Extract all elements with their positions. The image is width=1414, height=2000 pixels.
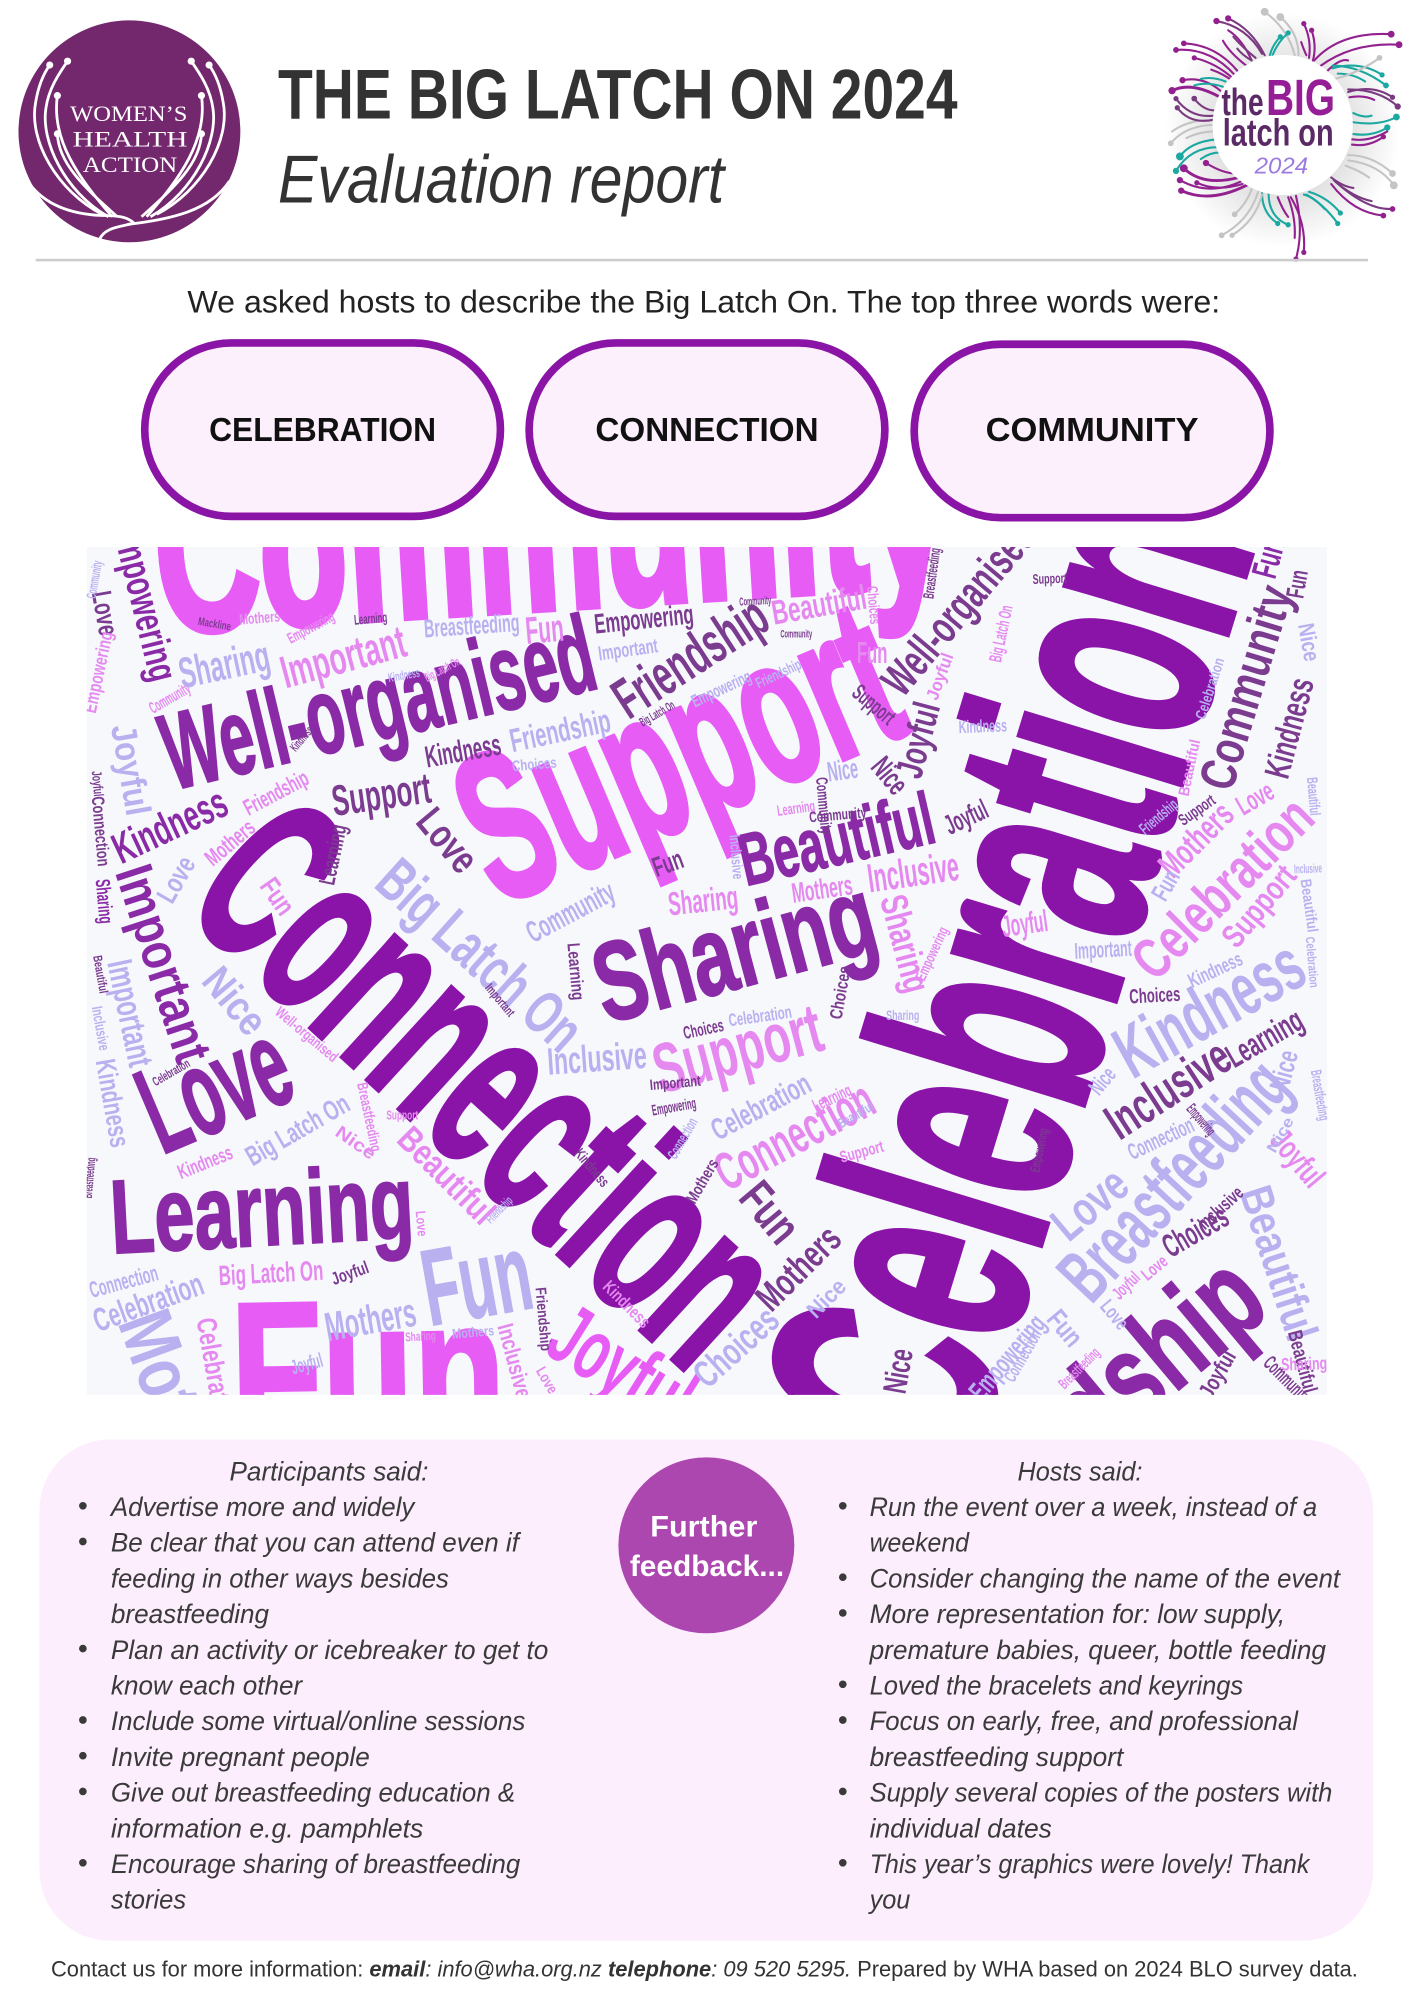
group: medium words: Joyful bbox=[89, 770, 107, 797]
word: Well-organised: Well-organised bbox=[149, 592, 606, 813]
group: medium words: Mothers bbox=[790, 869, 855, 909]
group: medium words: Beautiful bbox=[1283, 1328, 1321, 1395]
group: medium words: Support bbox=[847, 679, 901, 730]
list: participants said: Plan an activity or icebreaker to get to bbox=[111, 1635, 548, 1665]
badge: further feedback: Further bbox=[650, 1510, 757, 1543]
group: medium words: Important bbox=[275, 615, 411, 698]
footer contact line: Contact us for more information: email: info@wha.org.nz telephone: 09 520 5295. Prepared by WHA based on 2024 BLO survey data. bbox=[51, 1956, 1358, 1981]
group: medium words: Mothers bbox=[199, 814, 260, 871]
badge: further feedback bbox=[618, 1457, 794, 1633]
logo: Women's Health Action: ACTION bbox=[83, 153, 178, 177]
group: medium words: Love bbox=[1137, 1251, 1172, 1284]
group: medium words: Kindness bbox=[387, 665, 421, 685]
group: medium words: Friendship bbox=[532, 1287, 554, 1352]
title: THE BIG LATCH ON 2024 bbox=[278, 56, 958, 134]
group: medium words: Fun bbox=[729, 1171, 811, 1254]
group: medium words: Choices bbox=[511, 755, 557, 775]
group: medium words: Nice bbox=[332, 1122, 380, 1164]
list: hosts said: breastfeeding support bbox=[870, 1742, 1125, 1772]
group: medium words: Inclusive bbox=[864, 843, 962, 901]
group: medium words: Joyful bbox=[1263, 1123, 1332, 1195]
group: medium words: Fun bbox=[254, 872, 301, 921]
group: medium words: Breastfeeding bbox=[1055, 1345, 1104, 1393]
list: participants said: Include some virtual/online sessions bbox=[111, 1706, 525, 1736]
group: medium words: Learning bbox=[563, 942, 588, 1001]
word: Love: Love bbox=[119, 994, 311, 1180]
list: hosts said: Supply several copies of the posters with bbox=[870, 1778, 1332, 1808]
group: medium words: Love bbox=[413, 1210, 431, 1237]
group: medium words: Empowering bbox=[1183, 1101, 1219, 1139]
group: medium words: Beautiful bbox=[90, 954, 112, 994]
group: medium words: Celebration bbox=[150, 1056, 192, 1089]
group: medium words: Kindness bbox=[571, 1146, 612, 1191]
group: medium words: Nice bbox=[1083, 1062, 1121, 1100]
group: medium words: Sharing bbox=[405, 1328, 436, 1344]
group: medium words: Learning bbox=[776, 798, 816, 820]
group: medium words: Choices bbox=[1156, 1198, 1235, 1265]
group: medium words: Breastfeeding bbox=[353, 1081, 384, 1153]
pill: celebration: CELEBRATION bbox=[209, 412, 436, 449]
group: medium words: Joyful bbox=[289, 1350, 325, 1379]
logo: Women's Health Action: WOMEN’S bbox=[70, 102, 187, 126]
group: medium words: Fun bbox=[524, 607, 565, 653]
list: participants said: Invite pregnant people bbox=[111, 1742, 370, 1772]
group: medium words: Celebration bbox=[1193, 656, 1228, 722]
group: medium words: Fun bbox=[1041, 1304, 1089, 1353]
group: medium words: Important bbox=[649, 1073, 701, 1094]
group: medium words: Mothers bbox=[239, 608, 281, 629]
group: medium words: Beautiful bbox=[1297, 878, 1321, 933]
group: medium words: Empowering bbox=[688, 666, 754, 711]
word: Fun (lavender): Fun bbox=[413, 1211, 540, 1349]
group: medium words: Kindness bbox=[1185, 948, 1246, 993]
group: medium words: Empowering bbox=[963, 1308, 1052, 1406]
group: medium words: Nice bbox=[801, 1273, 851, 1323]
group: medium words: Mothers bbox=[682, 1155, 723, 1207]
group: medium words: Breastfeeding bbox=[920, 547, 944, 600]
list: hosts said: you bbox=[868, 1885, 910, 1915]
group: medium words: Joyful bbox=[1193, 1345, 1241, 1402]
group: medium words: Community bbox=[83, 559, 105, 600]
group: medium words: Support bbox=[838, 1137, 886, 1167]
list: hosts said: Consider changing the name of the event bbox=[870, 1563, 1342, 1593]
group: medium words: Inclusive bbox=[88, 1005, 112, 1052]
group: medium words: Sharing bbox=[871, 890, 938, 997]
group: medium words: Mothers bbox=[747, 1217, 850, 1320]
list: participants said: Encourage sharing of breastfeeding bbox=[111, 1849, 520, 1879]
group: medium words: Inclusive bbox=[492, 1321, 537, 1401]
group: medium words: Joyful bbox=[103, 721, 158, 819]
intro text: We asked hosts to describe the Big Latch On. The top three words were: bbox=[187, 283, 1220, 319]
group: medium words: Support bbox=[386, 1107, 419, 1122]
group: medium words: Important bbox=[597, 635, 659, 665]
list: hosts said: weekend bbox=[870, 1528, 970, 1558]
group: medium words: Fun bbox=[1281, 568, 1314, 600]
list: participants said bbox=[79, 1456, 548, 1915]
word: Beautiful: Beautiful bbox=[731, 776, 942, 902]
group: medium words: Love bbox=[86, 589, 124, 638]
group: medium words: Well-organised bbox=[871, 511, 1046, 705]
group: medium words: Choices bbox=[681, 1015, 725, 1043]
group: medium words: Celebration bbox=[88, 1266, 209, 1340]
group: medium words: Connection bbox=[705, 1070, 884, 1203]
group: medium words: Kindness bbox=[287, 723, 316, 754]
group: medium words: Sharing bbox=[91, 878, 116, 925]
group: medium words: Fun bbox=[1244, 535, 1293, 582]
badge: further feedback: feedback... bbox=[630, 1550, 784, 1583]
group: medium words: Love bbox=[1095, 1296, 1133, 1335]
word: Friendship: Friendship bbox=[865, 1227, 1290, 1614]
group: medium words: Love bbox=[1231, 775, 1279, 821]
group: medium words: Empowering bbox=[285, 608, 338, 647]
group: medium words: Big Latch On bbox=[364, 845, 597, 1065]
word: Joyful: Joyful bbox=[532, 1286, 712, 1449]
group: medium words: Celebration bbox=[1119, 785, 1327, 992]
group: medium words: Empowering bbox=[593, 598, 695, 640]
group: medium words: Nice bbox=[877, 1346, 921, 1396]
group: medium words: Support bbox=[1175, 790, 1219, 829]
group: medium words: Nice bbox=[825, 753, 860, 788]
panel: further feedback bbox=[40, 1440, 1373, 1941]
group: medium words: Support bbox=[1032, 570, 1067, 587]
list: hosts said: Loved the bracelets and keyrings bbox=[870, 1671, 1243, 1701]
group: medium words: Empowering bbox=[80, 630, 118, 715]
group: medium words: Inclusive bbox=[1194, 1183, 1248, 1234]
list: participants said: information e.g. pamphlets bbox=[111, 1813, 423, 1843]
group: medium words: Empowering bbox=[651, 1095, 697, 1120]
group: medium words: Mackline bbox=[197, 616, 232, 633]
list: participants said: Advertise more and widely bbox=[109, 1492, 416, 1522]
group: medium words: Important bbox=[482, 980, 519, 1020]
word: Connection: Connection bbox=[146, 750, 835, 1412]
group: medium words: Joyful bbox=[329, 1257, 371, 1289]
group: medium words: Community bbox=[809, 804, 867, 826]
group: medium words: Beautiful bbox=[769, 579, 870, 633]
group: medium words: Community bbox=[1259, 1352, 1315, 1409]
group: medium words: Community bbox=[780, 629, 813, 641]
group: medium words: Sharing bbox=[174, 632, 274, 698]
group: medium words: Choices bbox=[1129, 984, 1181, 1008]
list: participants said: Participants said: bbox=[230, 1456, 428, 1486]
group: medium words: Beautiful bbox=[390, 1119, 504, 1232]
group: medium words: Support bbox=[1215, 858, 1304, 955]
group: medium words: Learning bbox=[314, 822, 352, 887]
group: medium words: Important bbox=[99, 956, 161, 1070]
group: medium words: Support bbox=[644, 989, 831, 1108]
group: medium words: Empowering bbox=[913, 924, 952, 983]
logo: The Big Latch On 2024 bbox=[1165, 8, 1402, 262]
list: hosts said: Run the event over a week, instead of a bbox=[870, 1492, 1317, 1522]
group: medium words: Choices bbox=[826, 964, 855, 1021]
pill: community: COMMUNITY bbox=[986, 412, 1199, 449]
group: medium words: Friendship bbox=[482, 1193, 516, 1226]
group: medium words: Breastfeeding bbox=[80, 1157, 98, 1199]
group: medium words: Community bbox=[520, 875, 621, 950]
group: medium words: Choices bbox=[863, 585, 883, 625]
pill: community bbox=[914, 344, 1270, 518]
group: medium words: Kindness bbox=[1257, 674, 1322, 782]
group: medium words: Big Latch On bbox=[218, 1255, 324, 1291]
group: medium words: Nice bbox=[864, 750, 915, 801]
group: medium words: Empowering bbox=[102, 514, 187, 686]
list: hosts said bbox=[839, 1456, 1342, 1915]
list: participants said: stories bbox=[111, 1885, 186, 1915]
group: medium words: Mothers bbox=[101, 1299, 260, 1544]
group: medium words: Mothers bbox=[1150, 794, 1242, 885]
group: medium words: Support bbox=[329, 765, 434, 826]
list: hosts said: premature babies, queer, bottle feeding bbox=[869, 1635, 1326, 1665]
group: medium words: Community bbox=[146, 679, 194, 717]
group: medium words: Learning bbox=[809, 1080, 855, 1115]
group: medium words: Inclusive bbox=[1094, 1028, 1241, 1150]
list: participants said: feeding in other ways besides bbox=[111, 1563, 449, 1593]
word: Support: Support bbox=[423, 555, 931, 948]
group: medium words: Friendship bbox=[239, 765, 313, 820]
group: medium words: Connection bbox=[88, 795, 114, 867]
group: medium words: Breastfeeding bbox=[423, 609, 520, 643]
list: hosts said: individual dates bbox=[870, 1813, 1052, 1843]
group: medium words: Mothers bbox=[452, 1322, 495, 1342]
group: medium words: Well-organised bbox=[272, 1004, 341, 1066]
group: medium words: Inclusive bbox=[546, 1034, 648, 1084]
group: medium words: Nice bbox=[1264, 1047, 1304, 1094]
group: medium words: Love bbox=[532, 1364, 561, 1397]
group: medium words: Fun bbox=[857, 636, 887, 670]
group: medium words: Nice bbox=[193, 957, 277, 1044]
group: medium words: Kindness bbox=[105, 779, 235, 874]
group: medium words: Kindness bbox=[422, 728, 504, 774]
group: medium words: Choices bbox=[685, 1298, 788, 1396]
group: medium words: Joyful bbox=[939, 794, 993, 841]
logo: The Big Latch On 2024: BIG bbox=[1266, 69, 1335, 126]
group: medium words: Connection bbox=[86, 1260, 161, 1303]
word: Fun (large): Fun bbox=[229, 1257, 507, 1483]
group: medium words: Connection bbox=[665, 1115, 702, 1162]
group: medium words: Celebration bbox=[705, 1066, 817, 1147]
pill: celebration bbox=[145, 343, 500, 516]
group: medium words: Friendship bbox=[1135, 795, 1182, 838]
word cloud bbox=[86, 547, 1328, 1395]
group: medium words: Joyful bbox=[1108, 1268, 1144, 1303]
group: medium words: Friendship bbox=[507, 703, 614, 760]
group: medium words: Community bbox=[812, 776, 836, 836]
group: medium words: Love bbox=[1041, 1157, 1139, 1252]
logo: The Big Latch On 2024: latch on bbox=[1223, 111, 1334, 154]
group: medium words: Friendship bbox=[601, 584, 780, 731]
word: Community: Community bbox=[147, 376, 954, 681]
group: medium words: Love bbox=[150, 851, 202, 908]
list: hosts said: Hosts said: bbox=[1017, 1456, 1142, 1486]
group: medium words: Friendship bbox=[753, 656, 804, 692]
group: medium words: Beautiful bbox=[1230, 1179, 1329, 1347]
group: medium words: Beautiful bbox=[835, 1098, 876, 1131]
word: Sharing: Sharing bbox=[579, 851, 889, 1047]
list: hosts said: This year’s graphics were lovely! Thank bbox=[870, 1849, 1311, 1879]
group: medium words: Kindness bbox=[958, 715, 1007, 737]
group: medium words: Empowering bbox=[1026, 1127, 1051, 1174]
logo: The Big Latch On 2024: the bbox=[1221, 81, 1264, 124]
group: medium words: Connection bbox=[1123, 1112, 1198, 1165]
group: medium words: Celebration bbox=[190, 1315, 241, 1434]
list: participants said: breastfeeding bbox=[111, 1599, 269, 1629]
group: medium words: Big Latch On bbox=[240, 1088, 355, 1172]
word: Learning: Learning bbox=[107, 1144, 416, 1276]
group: medium words: Important bbox=[1074, 935, 1133, 964]
group: medium words: Important bbox=[103, 858, 223, 1070]
group: medium words: Connection bbox=[1000, 1326, 1046, 1385]
group: medium words: Mothers bbox=[321, 1289, 420, 1350]
group: medium words: Learning bbox=[1220, 1002, 1310, 1075]
group: medium words: Joyful bbox=[922, 650, 957, 703]
group: medium words: Breastfeeding bbox=[1307, 1069, 1332, 1122]
list: participants said: Give out breastfeeding education & bbox=[111, 1778, 515, 1808]
list: participants said: Be clear that you can attend even if bbox=[111, 1528, 521, 1558]
group: medium words: Sharing bbox=[1281, 1353, 1327, 1375]
group: medium words: Joyful bbox=[1000, 904, 1050, 944]
list: hosts said: Focus on early, free, and professional bbox=[870, 1706, 1299, 1736]
group: medium words: Beautiful bbox=[1303, 777, 1323, 816]
group: medium words: Big Latch On bbox=[985, 604, 1017, 664]
group: medium words: Nice bbox=[1293, 621, 1325, 663]
group: medium words: Sharing bbox=[886, 1007, 919, 1023]
group: medium words: Celebration bbox=[727, 1002, 793, 1030]
group: medium words: Beautiful bbox=[1176, 738, 1204, 798]
list: hosts said: More representation for: low supply, bbox=[870, 1599, 1285, 1629]
group: medium words: Celebration bbox=[1303, 936, 1322, 988]
group: medium words: Community bbox=[739, 595, 772, 609]
group: medium words: Love bbox=[407, 799, 488, 882]
group: medium words: Inclusive bbox=[725, 834, 746, 880]
group: medium words: Fun bbox=[648, 843, 687, 883]
group: medium words: Learning bbox=[353, 609, 388, 628]
group: medium words bbox=[86, 547, 1328, 1395]
pill: connection: CONNECTION bbox=[595, 412, 819, 449]
logo: Women's Health Action: HEALTH bbox=[73, 128, 187, 152]
group: medium words: Big Latch On bbox=[637, 697, 677, 729]
group: medium words: Community bbox=[1188, 578, 1304, 796]
group: medium words: Kindness bbox=[90, 1056, 136, 1150]
group: medium words: Sharing bbox=[666, 879, 740, 923]
group: medium words: Big Latch On bbox=[421, 654, 462, 685]
logo: Women's Health Action bbox=[18, 20, 240, 242]
pill: connection bbox=[529, 343, 885, 516]
group: medium words: Joyful bbox=[888, 698, 949, 783]
group: medium words: Kindness bbox=[175, 1142, 236, 1184]
group: medium words: Kindness bbox=[599, 1276, 655, 1332]
logo: The Big Latch On 2024: 2024 bbox=[1254, 152, 1308, 178]
subtitle: Evaluation report bbox=[278, 143, 727, 218]
list: participants said: know each other bbox=[111, 1671, 303, 1701]
group: medium words: Nice bbox=[1264, 1114, 1298, 1156]
group: medium words: Inclusive bbox=[1294, 860, 1322, 876]
group: medium words: Fun bbox=[1146, 865, 1186, 906]
